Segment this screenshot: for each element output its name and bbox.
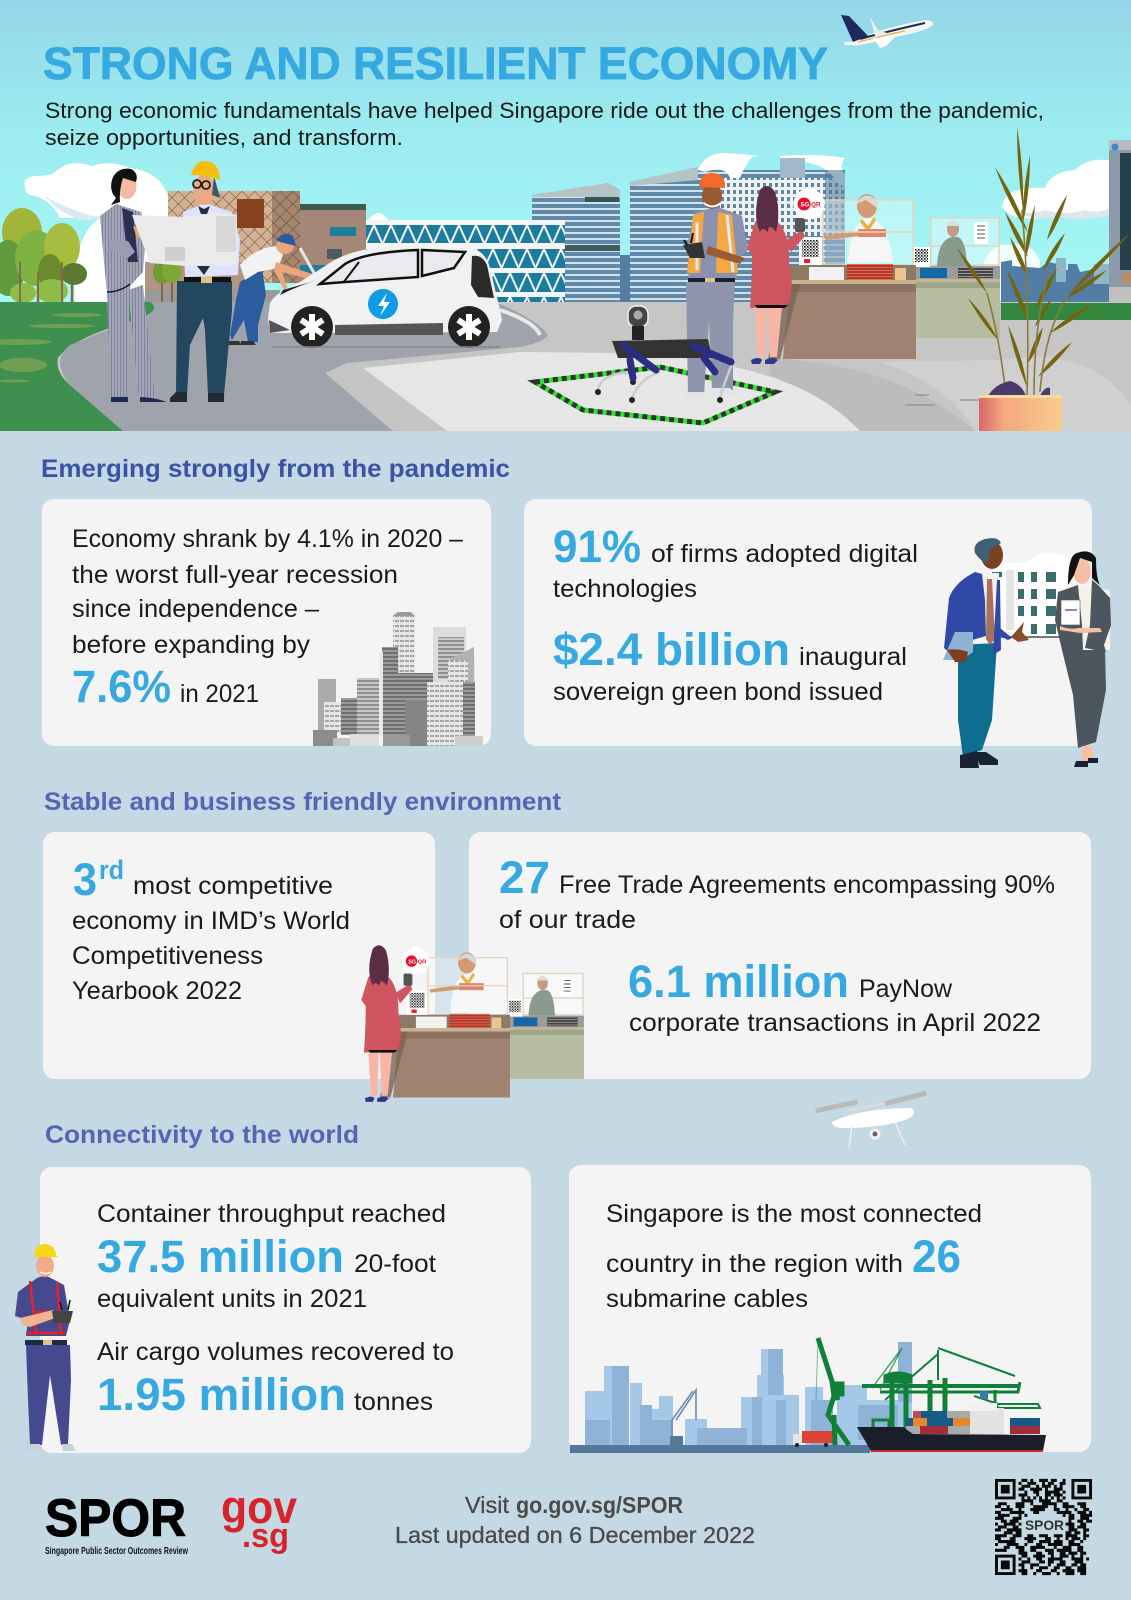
panel: digital and green bond xyxy=(524,499,1111,768)
text: submarine cables xyxy=(606,1200,982,1313)
white government building xyxy=(990,553,1072,638)
robot dog xyxy=(595,306,733,403)
panel: container and air cargo xyxy=(15,1167,531,1453)
plaza xyxy=(363,352,860,431)
text: trade and paynow: Free Trade Agreements encompassing 90% xyxy=(559,871,1055,899)
brick buildings xyxy=(145,191,366,302)
text: container and air cargo: tonnes xyxy=(354,1388,433,1416)
mid buildings xyxy=(532,167,698,302)
road xyxy=(60,302,548,431)
panel: submarine cables xyxy=(569,1165,1091,1453)
logo: gov.sg xyxy=(221,1481,297,1555)
text: digital and green bond: $2.4 billion xyxy=(553,624,790,675)
footer text: go.gov.sg/SPOR xyxy=(516,1492,683,1518)
hero illustration xyxy=(0,0,1131,431)
autonomous white car xyxy=(268,247,502,348)
text: digital and green bond: inaugural xyxy=(799,643,907,671)
QR code: SPOR xyxy=(1025,1517,1064,1533)
worker with yellow helmet xyxy=(15,1244,76,1451)
grey city skyline xyxy=(313,612,483,746)
text: competitiveness: Yearbook 2022 xyxy=(72,977,242,1005)
QR code xyxy=(995,1479,1092,1575)
containers xyxy=(906,1411,1040,1434)
glass lattice building xyxy=(354,220,565,302)
heading: emerging strongly: Emerging strongly from the pandemic xyxy=(41,455,510,483)
text: trade and paynow: 27 xyxy=(499,852,550,903)
man with yellow hard hat xyxy=(132,161,240,402)
text: economy: Economy shrank by 4.1% in 2020 – xyxy=(72,525,463,553)
ground xyxy=(0,302,1131,431)
logo: gov.sg: .sg xyxy=(242,1517,289,1555)
text: submarine cables: 26 xyxy=(912,1231,961,1282)
clouds xyxy=(24,160,1110,302)
text: trade and paynow: corporate transactions in April 2022 xyxy=(629,1009,1041,1037)
text: competitiveness: 3 xyxy=(73,854,97,905)
text: economy: in 2021 xyxy=(180,680,259,708)
businesswoman with document xyxy=(1055,551,1111,767)
logo: SPOR: SPOR xyxy=(45,1489,186,1548)
floor tape hexagon xyxy=(535,367,775,423)
text: competitiveness xyxy=(72,854,350,1005)
text: submarine cables: submarine cables xyxy=(606,1285,808,1313)
businessman in blue jacket xyxy=(943,538,1029,768)
engineer with orange helmet xyxy=(682,173,748,398)
heading: connectivity: Connectivity to the world xyxy=(45,1121,359,1149)
text: digital and green bond: sovereign green bond issued xyxy=(553,678,883,706)
potted plant xyxy=(957,127,1130,431)
food stall with customer: QR xyxy=(811,202,821,208)
text: digital and green bond: technologies xyxy=(553,575,697,603)
logo: SPOR: Singapore Public Sector Outcomes Review xyxy=(45,1546,188,1557)
right skyline and tower xyxy=(1001,140,1131,303)
text: competitiveness: rd xyxy=(99,855,124,885)
ship hull xyxy=(857,1427,1046,1452)
green cranes xyxy=(816,1338,1040,1445)
logo: gov.sg: gov xyxy=(221,1481,297,1533)
text: trade and paynow: PayNow xyxy=(859,975,953,1003)
text: competitiveness: Competitiveness xyxy=(72,942,263,970)
airplane xyxy=(841,15,933,48)
panel: trade and paynow xyxy=(469,832,1091,1079)
text: economy: since independence – xyxy=(72,595,319,623)
grass xyxy=(0,302,159,431)
curb xyxy=(325,347,520,431)
text: container and air cargo: Container throughput reached xyxy=(97,1200,446,1228)
subtitle: seize opportunities, and transform. xyxy=(45,125,403,150)
footer text: Visit xyxy=(465,1492,510,1518)
quay xyxy=(570,1445,870,1453)
food stall with customer: SG xyxy=(800,202,810,208)
text: trade and paynow: of our trade xyxy=(499,906,636,934)
illustration: food stall between cards xyxy=(361,945,584,1102)
skyline xyxy=(585,1342,912,1445)
text: digital and green bond: 91% xyxy=(553,521,641,572)
text: container and air cargo: equivalent units in 2021 xyxy=(97,1285,367,1313)
port scene xyxy=(570,1338,1046,1453)
ship superstructure xyxy=(965,1391,1004,1436)
text: digital and green bond xyxy=(553,521,918,706)
woman in pinstripe suit xyxy=(100,169,166,402)
text: container and air cargo xyxy=(97,1200,454,1420)
marina building xyxy=(698,153,845,302)
text: digital and green bond: of firms adopted digital xyxy=(651,540,918,568)
text: container and air cargo: 1.95 million xyxy=(97,1369,346,1420)
text: container and air cargo: Air cargo volumes recovered to xyxy=(97,1338,454,1366)
text: economy xyxy=(72,525,463,712)
trees xyxy=(0,208,182,303)
text: trade and paynow: 6.1 million xyxy=(628,956,849,1007)
text: economy: before expanding by xyxy=(72,631,311,659)
text: submarine cables: country in the region with xyxy=(606,1250,903,1278)
subtitle xyxy=(45,98,1044,150)
footer text xyxy=(395,1492,755,1548)
panel: economy 2021 xyxy=(42,499,491,746)
title: STRONG AND RESILIENT ECONOMY xyxy=(43,38,828,89)
illustration: drone xyxy=(815,1091,927,1148)
text: competitiveness: economy in IMD’s World xyxy=(72,907,350,935)
heading: stable and business friendly: Stable and business friendly environment xyxy=(44,788,562,816)
text: trade and paynow xyxy=(499,852,1055,1037)
footer text: Last updated on 6 December 2022 xyxy=(395,1522,755,1548)
text: submarine cables: Singapore is the most connected xyxy=(606,1200,982,1228)
text: container and air cargo: 20-foot xyxy=(354,1250,436,1278)
subtitle: Strong economic fundamentals have helped Singapore ride out the challenges from the pandemic, xyxy=(45,98,1044,123)
mechanic xyxy=(228,234,312,345)
panel: competitiveness xyxy=(43,832,435,1079)
text: competitiveness: most competitive xyxy=(133,872,333,900)
truck xyxy=(793,1431,834,1447)
food stall with customer xyxy=(747,186,1000,364)
text: economy: the worst full-year recession xyxy=(72,561,398,589)
text: economy: 7.6% xyxy=(72,661,171,712)
sky xyxy=(0,0,1131,310)
text: container and air cargo: 37.5 million xyxy=(97,1231,344,1282)
